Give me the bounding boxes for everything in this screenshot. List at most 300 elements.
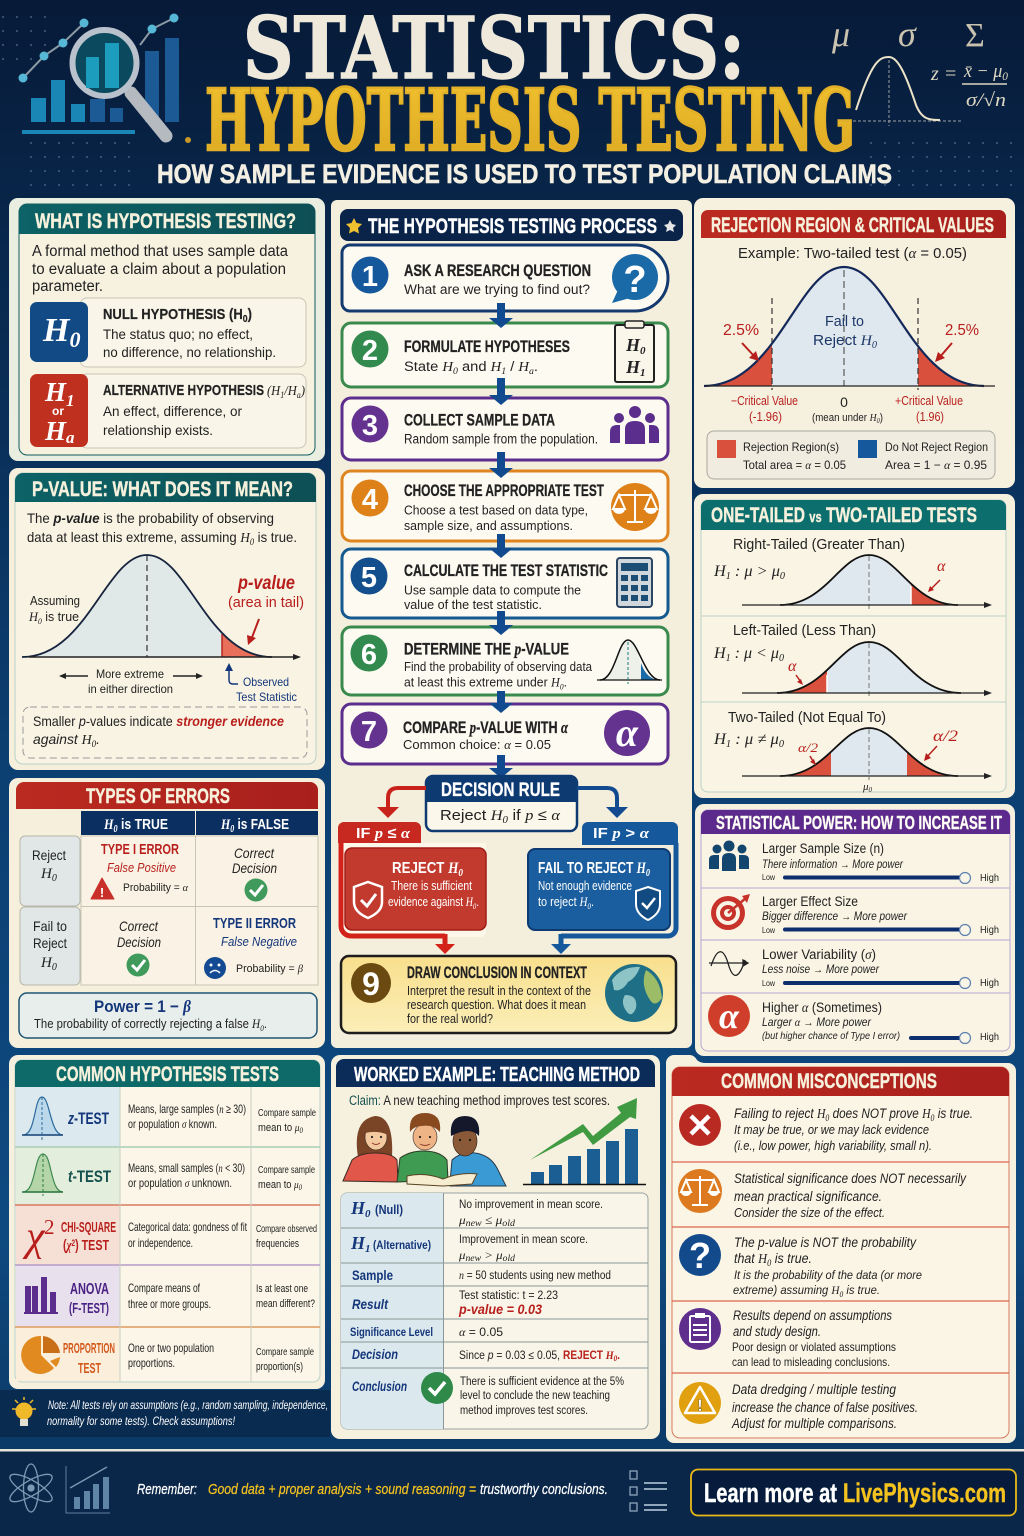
row: t-test: t-TEST <box>68 1167 111 1186</box>
definition text: data at least this extreme, assuming H <box>27 529 251 546</box>
item: p-value meaning <box>679 1234 922 1299</box>
icon: atom <box>6 1464 56 1512</box>
panel: one-tailed vs two-tailed <box>694 494 1015 798</box>
branch: reject H0: IF p ≤ α <box>356 825 411 842</box>
row: alpha: High <box>980 1031 999 1043</box>
item: failing to reject: 0 <box>931 1113 935 1123</box>
row: null: H <box>351 1198 365 1218</box>
row: two-tailed: 0 <box>779 739 784 750</box>
row: null: new <box>466 1218 482 1228</box>
icon: warning: ! <box>697 1396 703 1415</box>
row: decision: 0 <box>614 1354 617 1363</box>
step 5: value of the test statistic. <box>404 597 542 612</box>
legend: Rejection Region(s) <box>743 440 839 454</box>
icon: target <box>711 894 750 930</box>
label: observed test statistic: Test Statistic <box>236 690 297 704</box>
row: result: Test statistic: t = 2.23 <box>459 1290 558 1302</box>
item: failing to reject: Failing to reject H <box>734 1106 827 1121</box>
row: right-tailed: H <box>714 563 726 580</box>
card: null hypothesis: NULL HYPOTHESIS (H <box>103 306 264 323</box>
decision rule box: 0 <box>503 815 508 826</box>
row: z-test: Means, large samples (n ≥ 30) <box>128 1102 246 1116</box>
item: p-value meaning: is true. <box>843 1283 880 1297</box>
title <box>205 0 855 171</box>
row: right-tailed: : μ > μ <box>731 563 780 580</box>
row: null: μ <box>459 1213 465 1227</box>
footer band <box>0 1449 1024 1536</box>
label: assuming H0: 0 <box>38 617 42 626</box>
icon: alpha <box>604 710 650 756</box>
row: chi-square <box>22 1214 317 1260</box>
row: anova <box>24 1277 315 1317</box>
branch: reject H0: 0 <box>458 867 463 879</box>
cell: type I error: TYPE I ERROR <box>101 841 179 858</box>
row: sample: Sample <box>352 1267 393 1283</box>
row: alternative: 1 <box>365 1243 371 1255</box>
card: alternative hypothesis: relationship exists. <box>103 422 213 438</box>
row: sample: n = 50 students using new method <box>459 1270 611 1282</box>
row: alternative: new <box>465 1253 481 1263</box>
icon: calculator <box>617 558 652 607</box>
heading: TYPES OF ERRORS <box>86 785 230 808</box>
row: conclusion: Conclusion <box>352 1379 407 1394</box>
axis labels: 0 <box>877 417 880 425</box>
icon: scales <box>678 1169 722 1213</box>
row: right-tailed: 0 <box>780 571 785 582</box>
row: chi-square: χ <box>22 1214 46 1260</box>
power formula box: Power = 1 − β <box>94 997 191 1016</box>
row: result: Result <box>352 1296 389 1312</box>
cell: correct decision bottom left: Decision <box>117 934 161 950</box>
row: z-test: Compare sample <box>258 1107 316 1119</box>
header math symbols and formula: 0 <box>1002 69 1008 83</box>
heading: WORKED EXAMPLE: TEACHING METHOD <box>354 1064 640 1086</box>
cell: type I error <box>91 841 188 900</box>
item: practical significance: mean practical significance. <box>734 1189 882 1204</box>
row: chi-square: frequencies <box>256 1238 299 1250</box>
row: sample size: High <box>980 872 999 884</box>
callout: smaller p-values: Smaller p-values indicate stronger evidence <box>33 713 284 729</box>
icon: question <box>679 1234 721 1276</box>
panel: p-value <box>9 468 325 770</box>
row: effect size: High <box>980 924 999 936</box>
branch: fail to reject H0: FAIL TO REJECT H <box>538 860 666 877</box>
callout: p-value tail: (area in tail) <box>228 594 304 611</box>
row: z-test: z-TEST <box>67 1109 109 1128</box>
step 4 <box>342 471 668 541</box>
row: effect size: Low <box>762 925 776 935</box>
step 4: CHOOSE THE APPROPRIATE TEST <box>404 481 604 500</box>
row: decision <box>352 1347 620 1363</box>
step 3: COLLECT SAMPLE DATA <box>404 410 555 430</box>
row: alpha: (but higher chance of Type I error) <box>762 1031 900 1042</box>
definition text: to evaluate a claim about a population <box>32 261 286 278</box>
row: alternative: μ <box>459 1248 465 1262</box>
cell: correct decision bottom left <box>117 918 161 976</box>
item: practical significance <box>678 1169 967 1220</box>
item: data dredging <box>679 1382 918 1431</box>
cell: type I error: Probability = α <box>123 882 188 894</box>
cell: correct decision top right <box>232 845 277 902</box>
row: chi-square: CHI-SQUARE <box>61 1219 116 1236</box>
panel: common hypothesis tests <box>9 1055 325 1389</box>
item: failing to reject: H <box>921 1106 932 1121</box>
step 4: Choose a test based on data type, <box>404 502 588 518</box>
icon: mini p-value curve <box>597 640 662 684</box>
icon: clipboard with hypotheses: 0 <box>640 345 646 357</box>
axis labels: ) <box>880 412 883 424</box>
step 2: . <box>534 359 538 374</box>
step 5: Use sample data to compute the <box>404 582 581 598</box>
row: chi-square: (χ <box>63 1237 74 1254</box>
step 5: 5 <box>361 562 377 594</box>
card: alternative hypothesis: (H <box>267 384 282 399</box>
row: proportion: TEST <box>78 1360 101 1377</box>
header math symbols and formula: z = <box>930 63 957 85</box>
table: error matrix: H <box>41 955 52 971</box>
row: null: (Null) <box>375 1202 403 1217</box>
card: alternative hypothesis <box>30 374 306 448</box>
row: null: 0 <box>365 1208 371 1220</box>
step 2: 0 <box>453 366 458 376</box>
icon: people <box>709 840 749 871</box>
icon: t curve <box>22 1154 63 1196</box>
remember text: trustworthy conclusions. <box>480 1481 608 1498</box>
row: anova: Compare means of <box>128 1281 200 1295</box>
row: chi-square: 2 <box>44 1215 54 1239</box>
item: p-value meaning: It is the probability of the data (or more <box>734 1268 922 1282</box>
row: right-tailed: 1 <box>726 571 731 582</box>
item: p-value meaning: The p-value is NOT the probability <box>734 1235 917 1250</box>
item: data dredging: Adjust for multiple comparisons. <box>731 1416 897 1431</box>
label: left tail: 2.5% <box>723 322 759 339</box>
header icon: magnifier over bar chart <box>18 14 191 143</box>
step 3: Random sample from the population. <box>404 432 598 446</box>
branch: fail to reject H0: 0 <box>646 867 650 879</box>
decision rule box: DECISION RULE <box>441 780 560 801</box>
row: left-tailed: : μ < μ <box>731 645 779 662</box>
callout: smaller p-values: 0 <box>92 739 97 749</box>
card: alternative hypothesis: ) <box>300 384 305 399</box>
panel: worked example <box>331 1055 660 1439</box>
row: decision: . <box>617 1350 620 1362</box>
note: more extreme direction: in either direction <box>88 682 173 696</box>
row: conclusion: There is sufficient evidence at the 5% <box>460 1376 624 1388</box>
item: assumptions: can lead to misleading conclusions. <box>732 1355 890 1369</box>
table: error matrix <box>20 811 318 985</box>
item: failing to reject: (i.e., low power, high variability, small n). <box>734 1139 932 1153</box>
cell: type I error: False Positive <box>107 860 176 875</box>
header math symbols and formula: Σ <box>965 17 985 54</box>
row: left-tailed: H <box>714 645 726 662</box>
row: proportion: One or two population <box>128 1341 214 1355</box>
branch: fail to reject H0 <box>528 822 678 954</box>
step 9: conclusion: research question. What does it mean <box>407 997 586 1012</box>
label: assuming H0: H <box>28 609 39 624</box>
icon: alpha: α <box>616 710 639 755</box>
item: assumptions: and study design. <box>733 1324 821 1339</box>
panel: common misconceptions <box>666 1055 1016 1443</box>
card: alternative hypothesis: H <box>45 377 66 407</box>
branch: reject H0: evidence against H <box>388 895 482 909</box>
icon: globe <box>605 964 663 1022</box>
step 4: sample size, and assumptions. <box>404 518 573 533</box>
row: alpha: Larger α → More power <box>762 1017 872 1029</box>
row: anova: (F-TEST) <box>69 1300 109 1317</box>
icon: bars <box>24 1277 58 1314</box>
icon: shield with check <box>354 882 382 918</box>
step 9: conclusion: 9 <box>362 966 380 1002</box>
row: sample size: Larger Sample Size (n) <box>762 841 884 856</box>
row: conclusion: level to conclude the new teaching <box>460 1390 610 1402</box>
cell: type II error <box>204 915 303 979</box>
callout: p-value tail: p-value <box>237 573 295 594</box>
row: conclusion <box>352 1372 624 1417</box>
step 2: and <box>458 359 491 374</box>
row: z-test: 0 <box>300 1126 303 1135</box>
definition text: 0 <box>250 537 255 547</box>
row: result <box>352 1290 558 1317</box>
row: variability: Lower Variability (σ) <box>762 947 876 962</box>
item: p-value meaning: is true. <box>771 1251 812 1266</box>
row: null: ≤ μ <box>482 1213 502 1227</box>
heading: ONE-TAILED vs TWO-TAILED TESTS <box>711 504 977 527</box>
table: error matrix: 0 <box>52 962 57 973</box>
heading: COMMON HYPOTHESIS TESTS <box>56 1063 279 1086</box>
step 4: 4 <box>362 484 378 516</box>
definition text: The p-value is the probability of observing <box>27 510 274 526</box>
icon: chart <box>66 1466 110 1513</box>
row: effect size: Larger Effect Size <box>762 894 858 909</box>
heading <box>672 1067 1009 1096</box>
row: significance: α = 0.05 <box>459 1325 503 1339</box>
step 3 <box>342 398 668 460</box>
branch: fail to reject H0: . <box>591 895 594 909</box>
call to action: Learn more at <box>704 1478 837 1508</box>
item: failing to reject: is true. <box>934 1106 973 1121</box>
panel: statistical power <box>695 804 1015 1056</box>
header math symbols and formula: x̄ − μ <box>964 61 1004 82</box>
row: alternative: old <box>503 1253 516 1263</box>
row: decision: Since p = 0.03 ≤ 0.05, <box>459 1350 560 1362</box>
heading <box>336 1059 655 1087</box>
branch: fail to reject H0: IF p > α <box>593 825 650 842</box>
decision rule box <box>426 776 577 831</box>
axis labels <box>731 394 963 425</box>
panel: rejection region <box>694 198 1015 488</box>
decision rule box: p ≤ α <box>525 807 559 824</box>
axis labels: (mean under H <box>812 412 878 424</box>
step 5: CALCULATE THE TEST STATISTIC <box>404 561 608 580</box>
step 7: COMPARE p-VALUE WITH α <box>403 718 568 737</box>
card: null hypothesis: 0 <box>243 314 248 325</box>
row: proportion: proportions. <box>128 1356 175 1370</box>
table: error matrix: Reject <box>32 847 66 863</box>
chart: two-tailed bell curve <box>700 267 995 390</box>
chart: two-tailed bell curve: Fail to <box>825 313 864 330</box>
branch: reject H0: REJECT H <box>392 860 461 877</box>
arrow: to fail-to-reject branch <box>577 788 628 818</box>
step 2: 1 <box>501 366 506 376</box>
row: variability <box>709 947 999 989</box>
icon: clipboard with hypotheses: 1 <box>640 367 646 379</box>
icon: warning <box>679 1382 721 1424</box>
row: left-tailed: 0 <box>779 653 784 664</box>
label: assuming H0: Assuming <box>30 593 80 608</box>
illustration: three students reading <box>343 1113 506 1186</box>
definition text: parameter. <box>32 278 103 295</box>
icon: balance scale <box>611 483 659 531</box>
table: error matrix: Fail to <box>33 918 67 934</box>
cell: type II error: False Negative <box>221 934 297 949</box>
step 9: conclusion: Interpret the result in the context of the <box>407 983 591 998</box>
heading: WHAT IS HYPOTHESIS TESTING? <box>35 210 296 233</box>
branch: fail to reject H0: to reject H <box>538 895 589 909</box>
row: chi-square: ) TEST <box>75 1237 109 1254</box>
table: error matrix: is FALSE <box>234 816 289 833</box>
branch: reject H0: There is sufficient <box>391 879 472 893</box>
step 6: DETERMINE THE p-VALUE <box>404 640 569 658</box>
table: error matrix: 0 <box>230 824 234 835</box>
callout: smaller p-values <box>23 707 307 758</box>
arrow: to reject branch <box>377 788 426 818</box>
row: right-tailed: Right-Tailed (Greater Than) <box>733 537 905 553</box>
branch: fail to reject H0: 0 <box>587 902 591 911</box>
step 6: Find the probability of observing data <box>404 659 593 674</box>
note: more extreme direction <box>59 667 203 696</box>
row: t-test <box>22 1154 315 1196</box>
card: alternative hypothesis: 1 <box>66 391 75 410</box>
step 2: / <box>506 359 518 374</box>
row: left-tailed <box>713 623 992 697</box>
table: error matrix: H <box>41 866 52 882</box>
row: t-test: 0 <box>299 1183 302 1192</box>
row: null: old <box>502 1218 516 1228</box>
table: error matrix: 0 <box>52 873 57 884</box>
card: null hypothesis: 0 <box>69 327 80 352</box>
row: left-tailed: α <box>788 658 797 675</box>
card: alternative hypothesis: a <box>66 428 75 447</box>
label: observed test statistic: Observed <box>243 675 289 689</box>
heading <box>15 473 316 502</box>
callout: p-value tail <box>228 573 304 645</box>
panel: what is hypothesis testing <box>9 198 325 461</box>
item: p-value meaning: extreme) assuming H <box>733 1283 840 1297</box>
cell: type II error: TYPE II ERROR <box>213 915 296 932</box>
cell: correct decision bottom left: Correct <box>119 918 159 934</box>
legend: Total area = α = 0.05 <box>743 458 846 472</box>
note: more extreme direction: More extreme <box>96 667 164 681</box>
claim text: Claim: A new teaching method improves test scores. <box>349 1093 610 1108</box>
panel: types of errors <box>9 778 325 1048</box>
step 9: conclusion <box>341 956 676 1033</box>
row: alpha: Higher α (Sometimes) <box>762 1000 882 1015</box>
icon: z curve <box>22 1097 63 1140</box>
icon: people <box>610 406 659 444</box>
row: alternative: > μ <box>481 1248 503 1262</box>
power formula box: . <box>264 1017 267 1031</box>
legend <box>707 431 995 479</box>
row: alternative: (Alternative) <box>373 1238 431 1252</box>
row: sample <box>352 1267 611 1283</box>
row: two-tailed: 1 <box>726 739 731 750</box>
icon: question speech bubble <box>612 254 658 303</box>
card: alternative hypothesis: a <box>297 390 301 400</box>
label: assuming H0: is true <box>42 609 79 624</box>
cell: type II error: Probability = β <box>236 963 303 975</box>
row: chi-square: or independence. <box>128 1236 193 1250</box>
icon: wave <box>709 952 748 975</box>
row: t-test: Means, small samples (n < 30) <box>128 1161 245 1175</box>
callout: smaller p-values: . <box>96 731 100 747</box>
process title bar: THE HYPOTHESIS TESTING PROCESS <box>368 215 657 238</box>
table: error matrix: Reject <box>33 935 67 951</box>
cell: correct decision top right: Correct <box>234 845 275 861</box>
row: two-tailed: μ <box>863 781 869 793</box>
step 1 <box>342 245 668 311</box>
row: sample size: Low <box>762 872 776 882</box>
card: alternative hypothesis: or <box>52 404 64 418</box>
header math symbols and formula: σ/√n <box>966 90 1006 111</box>
power formula box: The probability of correctly rejecting a false H <box>34 1017 272 1031</box>
row: proportion: PROPORTION <box>63 1340 115 1357</box>
row: decision: Decision <box>352 1347 398 1362</box>
card: alternative hypothesis: ALTERNATIVE HYPOTHESIS <box>103 382 264 399</box>
row: alternative: H <box>351 1233 365 1253</box>
item: failing to reject: 0 <box>825 1113 830 1123</box>
step 2: H <box>490 359 503 374</box>
row: t-test: Compare sample <box>258 1164 315 1176</box>
remember text: Good data + proper analysis + sound reasoning = <box>208 1481 476 1498</box>
step 6: . <box>564 674 567 690</box>
row: alternative <box>350 1233 588 1263</box>
card: alternative hypothesis: /H <box>283 384 298 399</box>
label: left tail <box>723 322 759 361</box>
step 9: conclusion: DRAW CONCLUSION IN CONTEXT <box>407 964 587 982</box>
definition text: is true. <box>254 529 297 545</box>
axis labels: +Critical Value <box>895 394 963 408</box>
step 2: 2 <box>362 335 378 367</box>
chart example label: Example: Two-tailed test (α = 0.05) <box>738 245 967 262</box>
icon: clipboard with hypotheses <box>615 321 654 382</box>
item: p-value meaning: 0 <box>840 1290 843 1299</box>
icon: alpha <box>708 995 750 1037</box>
legend: Area = 1 − α = 0.95 <box>885 458 987 472</box>
table: error matrix: H <box>103 817 115 833</box>
step 1: ASK A RESEARCH QUESTION <box>404 261 591 280</box>
row: two-tailed: : μ ≠ μ <box>731 731 779 748</box>
row: chi-square: Compare observed <box>256 1223 317 1235</box>
callout: smaller p-values: against H <box>33 731 92 748</box>
icon: pie <box>21 1336 60 1374</box>
row: proportion <box>21 1336 314 1377</box>
row: two-tailed: H <box>714 731 726 748</box>
label: right tail: 2.5% <box>945 322 979 339</box>
icon: clipboard with hypotheses: H <box>626 335 640 355</box>
icon: light bulb <box>12 1397 36 1426</box>
step 1: 1 <box>362 261 378 293</box>
icon: shield with check <box>636 887 660 920</box>
row: decision: REJECT H <box>563 1350 615 1362</box>
step 6: 0 <box>560 682 564 692</box>
icon: question: ? <box>689 1235 711 1276</box>
step 7: Common choice: α = 0.05 <box>403 737 551 752</box>
step 9: conclusion: for the real world? <box>407 1011 493 1026</box>
row: two-tailed: 0 <box>869 786 873 794</box>
branch: reject H0: . <box>476 895 479 909</box>
row: z-test: or population σ known. <box>128 1117 217 1131</box>
item: p-value meaning: 0 <box>767 1258 772 1268</box>
